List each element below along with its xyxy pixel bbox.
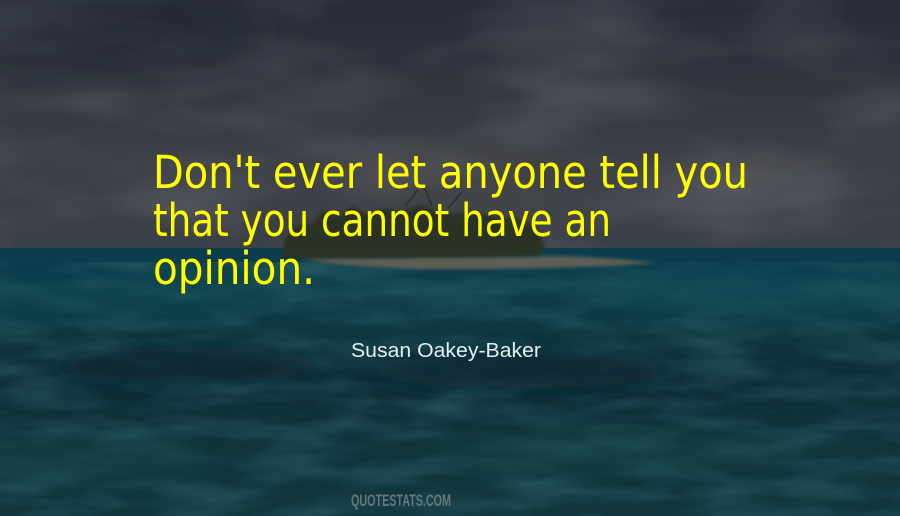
island xyxy=(282,186,655,269)
background: sea xyxy=(0,248,900,516)
watermark: QUOTESTATS.COM xyxy=(351,491,451,510)
quote line 1: Don't ever let anyone tell you xyxy=(153,146,748,199)
background: sky xyxy=(0,0,900,250)
author: Susan Oakey-Baker xyxy=(351,340,541,362)
quote line 3: opinion. xyxy=(153,242,315,295)
quote line 2: that you cannot have an xyxy=(153,194,611,247)
quote text xyxy=(153,146,748,295)
